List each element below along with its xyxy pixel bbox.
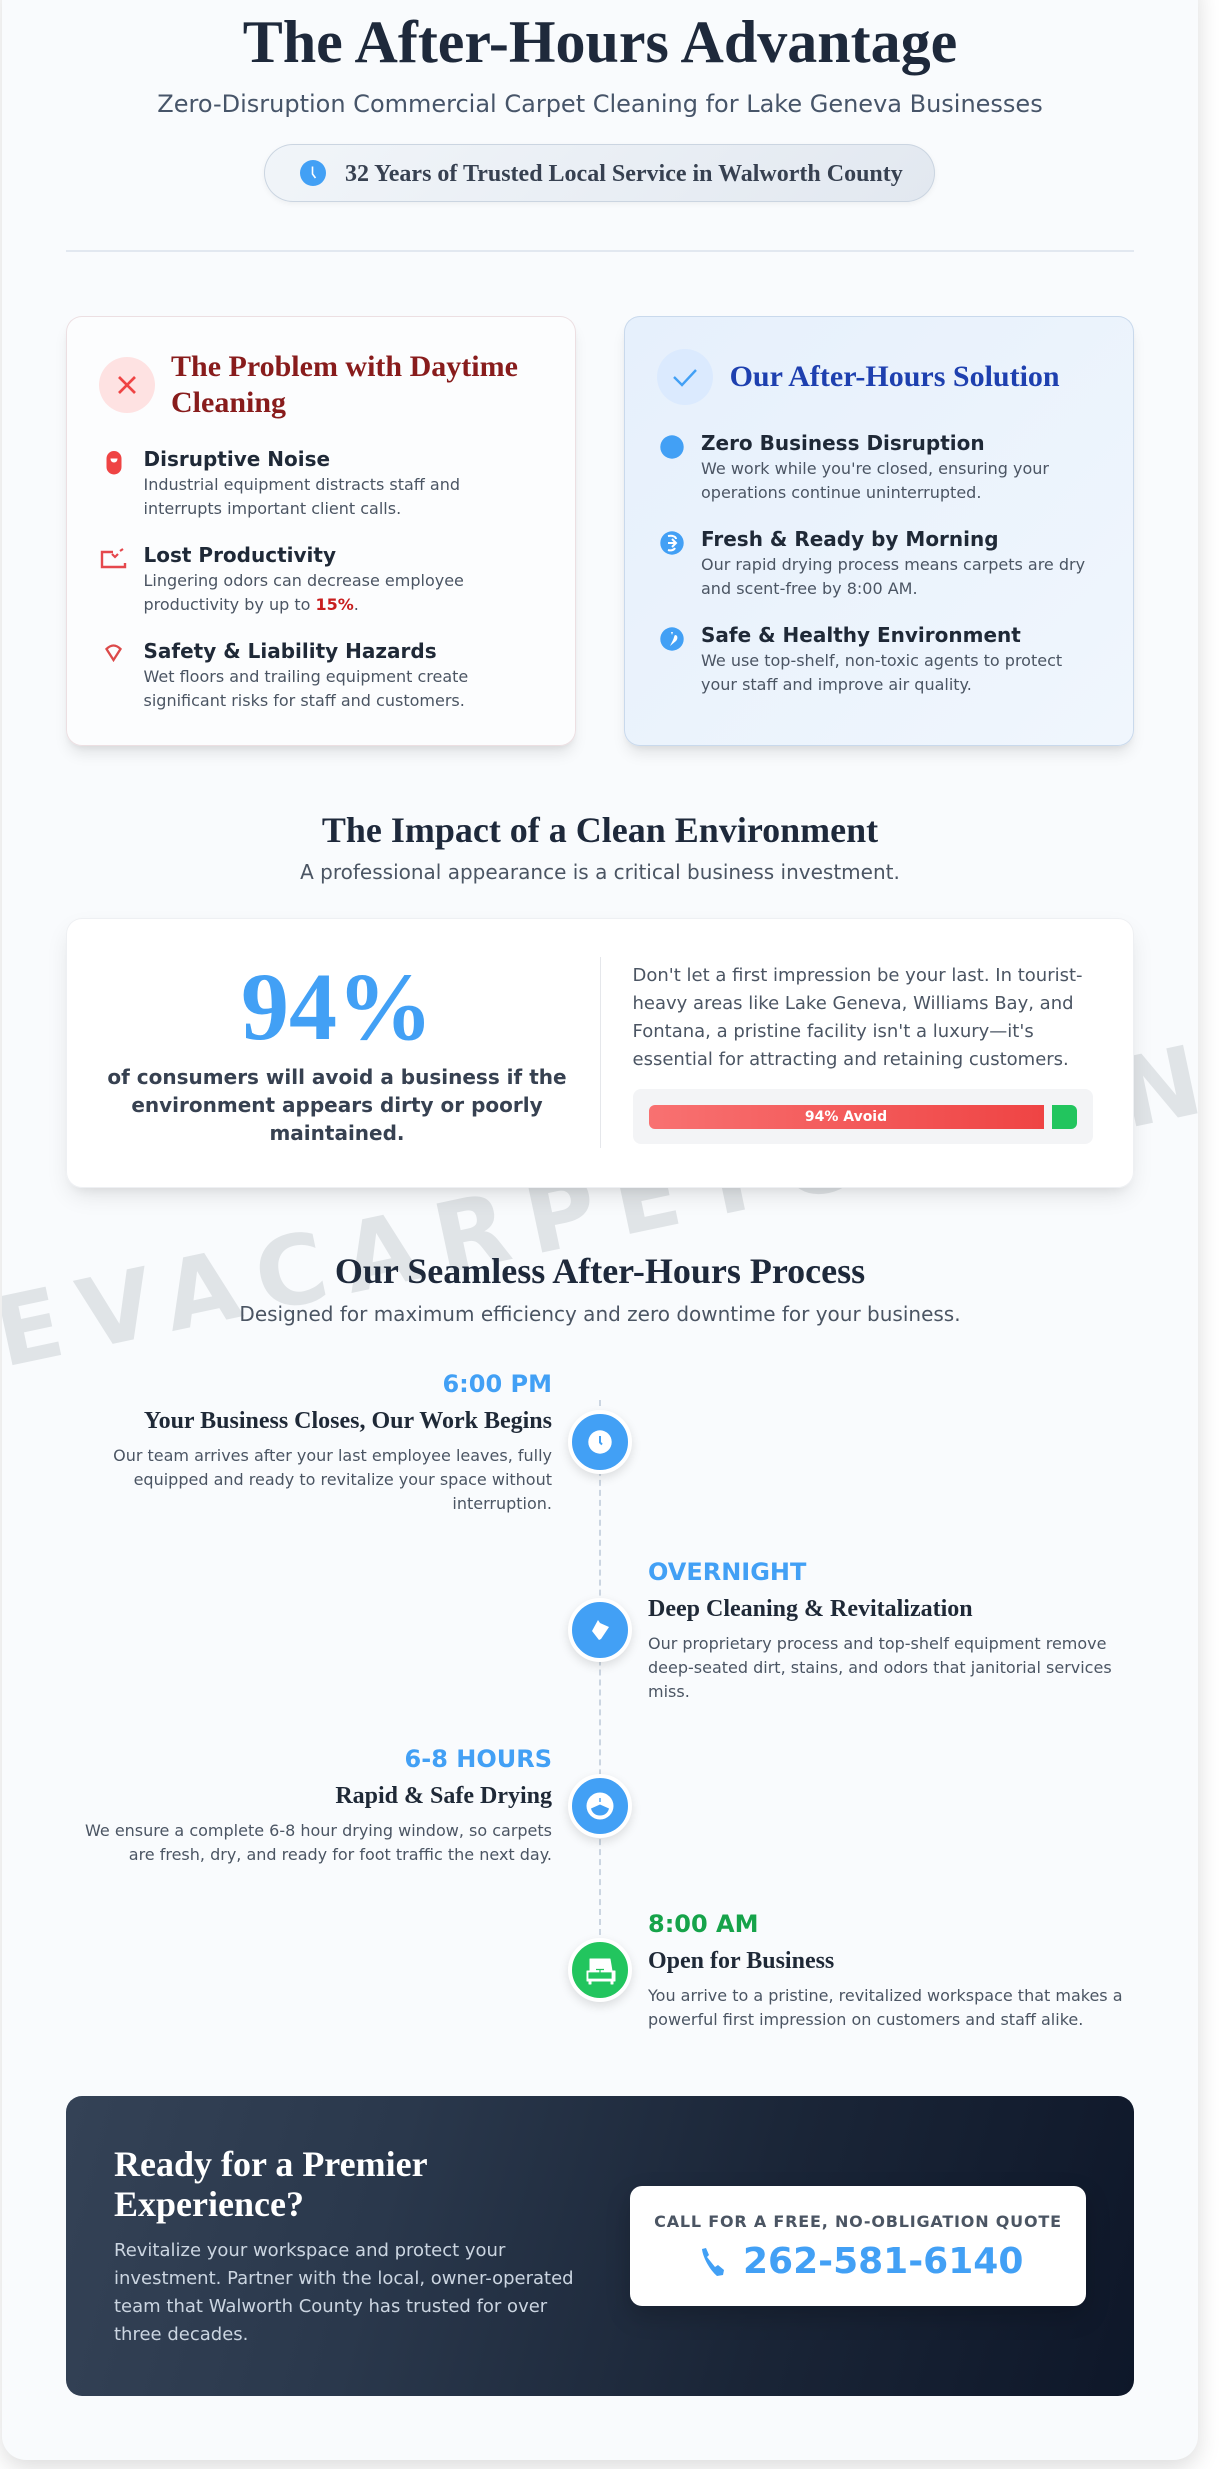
step: 6-8 hours bbox=[85, 1745, 552, 1864]
badge text: 32 Years of Trusted Local Service in Walworth County bbox=[345, 160, 903, 186]
step text: interruption. bbox=[452, 1494, 552, 1513]
cta text: team that Walworth County has trusted for over bbox=[114, 2296, 547, 2317]
item text: Wet floors and trailing equipment create bbox=[144, 667, 468, 686]
step text: Our team arrives after your last employee leaves, fully bbox=[113, 1446, 552, 1465]
item: safe and healthy bbox=[660, 623, 1062, 694]
subtitle: Zero-Disruption Commercial Carpet Cleaning for Lake Geneva Businesses bbox=[157, 90, 1043, 118]
subheading: process: Designed for maximum efficiency and zero downtime for your business. bbox=[239, 1302, 961, 1326]
stat caption: environment appears dirty or poorly bbox=[131, 1093, 543, 1117]
bar chart bbox=[632, 1089, 1092, 1144]
call box bbox=[630, 2186, 1086, 2306]
panel heading: Cleaning bbox=[171, 386, 286, 419]
item text: Our rapid drying process means carpets are dry bbox=[701, 555, 1085, 574]
step text: You arrive to a pristine, revitalized workspace that makes a bbox=[648, 1986, 1123, 2005]
cta text: investment. Partner with the local, owner-operated bbox=[114, 2268, 574, 2289]
item text: Lingering odors can decrease employee bbox=[144, 571, 464, 590]
icon: leaf bbox=[660, 627, 684, 651]
item text: your staff and improve air quality. bbox=[701, 675, 972, 694]
step: 8:00 AM bbox=[648, 1910, 1123, 2029]
step time: OVERNIGHT bbox=[648, 1558, 806, 1586]
item text bbox=[701, 459, 1049, 502]
step time: 8:00 AM bbox=[648, 1910, 759, 1938]
item text: productivity by up to 15%. bbox=[144, 595, 359, 614]
big number: 94% bbox=[241, 953, 433, 1060]
item: safety hazards bbox=[105, 639, 468, 710]
stat caption bbox=[107, 1065, 567, 1145]
icon: hazard bbox=[105, 644, 122, 662]
item text: operations continue uninterrupted. bbox=[701, 483, 981, 502]
item text bbox=[144, 667, 468, 710]
item title: Disruptive Noise bbox=[144, 447, 330, 471]
icon: bed node bbox=[568, 1938, 632, 2002]
phone number: 262-581-6140 bbox=[743, 2240, 1023, 2282]
impact text: Fontana, a pristine facility isn't a luxury—it's bbox=[632, 1021, 1034, 1042]
panel: call to action bbox=[66, 2096, 1134, 2396]
step text: powerful first impression on customers and staff alike. bbox=[648, 2010, 1083, 2029]
cta heading: Experience? bbox=[114, 2184, 304, 2224]
badge: 32 years of service bbox=[264, 144, 935, 202]
item: fresh and ready bbox=[660, 527, 1085, 598]
step text: deep-seated dirt, stains, and odors that janitorial services bbox=[648, 1658, 1112, 1677]
step title: Open for Business bbox=[648, 1948, 834, 1974]
item title: Safe & Healthy Environment bbox=[701, 623, 1021, 647]
item text: and scent-free by 8:00 AM. bbox=[701, 579, 918, 598]
cta text bbox=[114, 2240, 574, 2345]
icon: check bbox=[657, 349, 713, 405]
item title: Zero Business Disruption bbox=[701, 431, 985, 455]
panel: the problem bbox=[66, 316, 576, 746]
cta heading: Ready for a Premier bbox=[114, 2144, 428, 2184]
item text bbox=[701, 555, 1085, 598]
step text bbox=[113, 1446, 552, 1513]
step text bbox=[648, 1986, 1123, 2029]
icon: cross bbox=[99, 357, 155, 413]
call label: CALL FOR A FREE, NO-OBLIGATION QUOTE bbox=[654, 2212, 1062, 2231]
step text: miss. bbox=[648, 1682, 690, 1701]
step title: Rapid & Safe Drying bbox=[335, 1783, 552, 1809]
step title: Your Business Closes, Our Work Begins bbox=[144, 1408, 552, 1434]
item title: Fresh & Ready by Morning bbox=[701, 527, 999, 551]
item text: significant risks for staff and customers. bbox=[144, 691, 465, 710]
item: zero disruption bbox=[660, 431, 1049, 502]
icon: clock bbox=[300, 160, 326, 186]
item title: Lost Productivity bbox=[144, 543, 336, 567]
item: disruptive noise bbox=[106, 447, 460, 518]
icon: phone bbox=[702, 2248, 724, 2276]
panel: 94 percent stat bbox=[66, 918, 1134, 1188]
stat caption: maintained. bbox=[269, 1121, 405, 1145]
heading: impact: The Impact of a Clean Environment bbox=[322, 810, 878, 850]
icon: tray bbox=[100, 548, 126, 568]
impact text bbox=[632, 965, 1083, 1070]
panel heading: The Problem with Daytime bbox=[171, 350, 518, 383]
panel heading bbox=[171, 350, 518, 419]
icon: dot bbox=[660, 435, 684, 459]
panel: the solution bbox=[624, 316, 1134, 746]
impact text: Don't let a first impression be your last. In tourist- bbox=[632, 965, 1083, 986]
step text bbox=[648, 1634, 1112, 1701]
bar: remainder bbox=[1052, 1105, 1076, 1129]
item text bbox=[144, 571, 464, 614]
subheading: impact: A professional appearance is a critical business investment. bbox=[300, 860, 900, 884]
impact text: heavy areas like Lake Geneva, Williams Bay, and bbox=[632, 993, 1074, 1014]
stat caption: of consumers will avoid a business if the bbox=[107, 1065, 567, 1089]
step text: equipped and ready to revitalize your space without bbox=[134, 1470, 552, 1489]
item text: We use top-shelf, non-toxic agents to protect bbox=[701, 651, 1062, 670]
step: overnight bbox=[648, 1558, 1112, 1701]
step time: 6-8 HOURS bbox=[405, 1745, 552, 1773]
panel heading: Our After-Hours Solution bbox=[730, 360, 1060, 393]
step text: are fresh, dry, and ready for foot traffic the next day. bbox=[129, 1845, 552, 1864]
step time: 6:00 PM bbox=[442, 1370, 552, 1398]
impact text: essential for attracting and retaining customers. bbox=[632, 1049, 1069, 1070]
title: The After-Hours Advantage bbox=[243, 9, 957, 75]
step text: Our proprietary process and top-shelf equipment remove bbox=[648, 1634, 1106, 1653]
item text bbox=[144, 475, 460, 518]
item text: We work while you're closed, ensuring your bbox=[701, 459, 1049, 478]
item text: interrupts important client calls. bbox=[144, 499, 401, 518]
step text bbox=[85, 1821, 552, 1864]
icon: noise bbox=[106, 451, 122, 474]
item title: Safety & Liability Hazards bbox=[144, 639, 437, 663]
icon: drying node bbox=[568, 1774, 632, 1838]
item text: Industrial equipment distracts staff and bbox=[144, 475, 460, 494]
step: 6:00 PM bbox=[113, 1370, 552, 1513]
cta text: three decades. bbox=[114, 2324, 248, 2345]
icon: clock node bbox=[568, 1410, 632, 1474]
item: lost productivity bbox=[100, 543, 464, 614]
step title: Deep Cleaning & Revitalization bbox=[648, 1596, 973, 1622]
heading: process: Our Seamless After-Hours Process bbox=[335, 1251, 865, 1291]
bar: 94% avoid bbox=[648, 1105, 1044, 1129]
cta heading bbox=[114, 2144, 428, 2224]
icon: cleaning node bbox=[568, 1598, 632, 1662]
bar: 94% avoid: 94% Avoid bbox=[805, 1109, 887, 1125]
step text: We ensure a complete 6-8 hour drying window, so carpets bbox=[85, 1821, 552, 1840]
cta text: Revitalize your workspace and protect your bbox=[114, 2240, 505, 2261]
item text bbox=[701, 651, 1062, 694]
icon: fresh bbox=[660, 531, 684, 555]
